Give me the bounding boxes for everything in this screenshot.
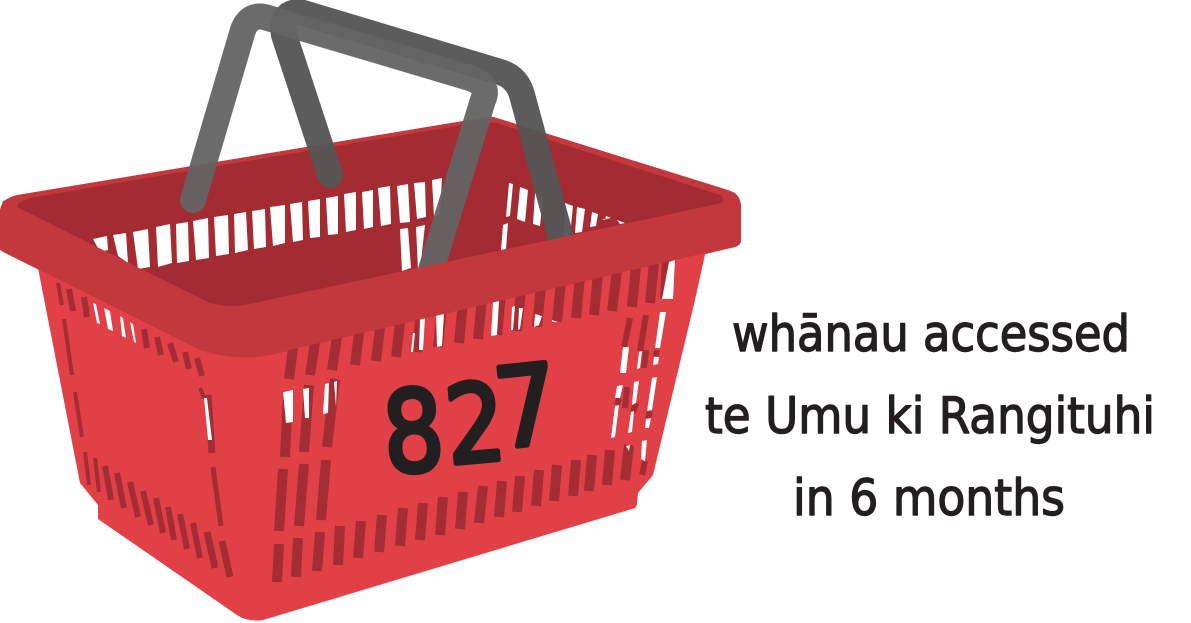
number: 827: 8 bbox=[379, 364, 448, 500]
basket body bbox=[38, 250, 706, 620]
number: 827: 7 bbox=[488, 340, 565, 474]
back wall openings bbox=[93, 178, 625, 271]
front slots bbox=[277, 258, 667, 582]
left side openings bbox=[93, 303, 212, 440]
basket rim front bbox=[0, 192, 741, 358]
left side slots bbox=[58, 283, 230, 577]
caption text: in 6 months bbox=[793, 469, 1065, 527]
number: 827 bbox=[379, 340, 565, 500]
number: 827: 2 bbox=[440, 360, 510, 490]
caption text: te Umu ki Rangituhi bbox=[705, 387, 1155, 445]
caption text bbox=[705, 305, 1155, 527]
front and right openings bbox=[283, 260, 675, 461]
shopping basket illustration bbox=[0, 12, 741, 620]
basket rim back bbox=[0, 117, 741, 360]
caption text: whānau accessed bbox=[732, 305, 1130, 363]
back handle bbox=[283, 12, 561, 238]
basket interior bbox=[17, 122, 724, 307]
front handle bbox=[193, 16, 485, 270]
